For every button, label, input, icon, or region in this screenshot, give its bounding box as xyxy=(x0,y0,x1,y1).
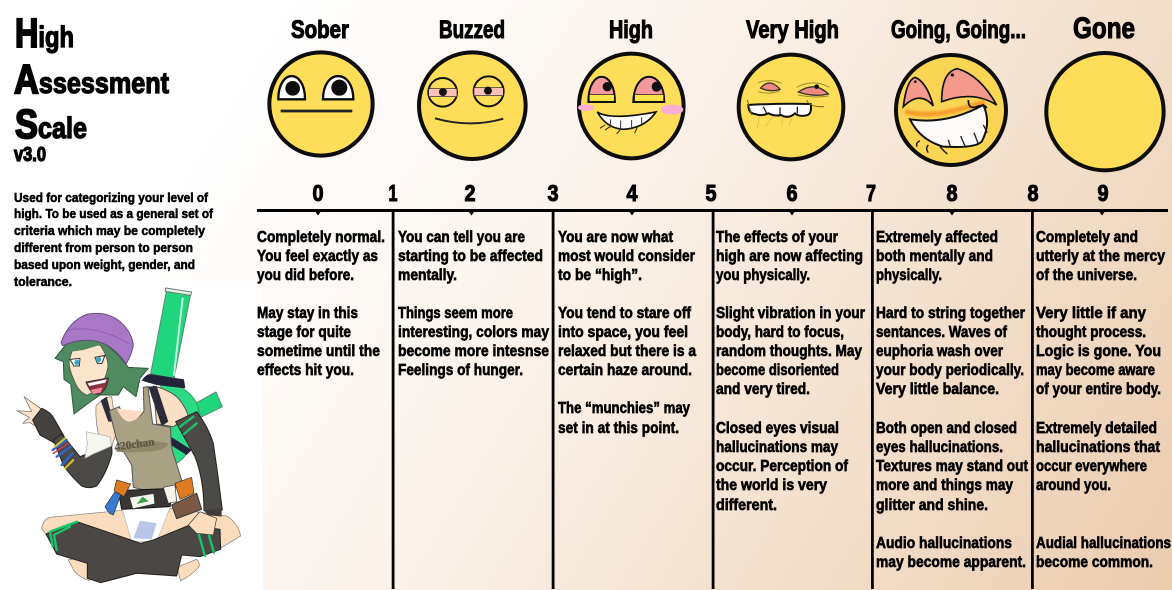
text column: level 2 xyxy=(398,229,549,379)
title xyxy=(14,10,169,147)
text column: level 6: The effects of your xyxy=(716,229,838,246)
text column: level 0: you did before. xyxy=(257,267,354,284)
icon: gone face xyxy=(1046,53,1164,170)
text column: level 9: Completely and xyxy=(1036,229,1138,246)
text column: level 4: The “munchies” may xyxy=(558,400,690,417)
icon: very high face xyxy=(739,55,843,159)
text column: level 2: Feelings of hunger. xyxy=(398,362,523,379)
text column: level 4: set in at this point. xyxy=(558,420,679,437)
text column: level 6: and very tired. xyxy=(716,381,810,398)
scale numbers: 6 xyxy=(786,180,798,206)
scale numbers: 8 xyxy=(946,180,958,206)
version label: v3.0 xyxy=(14,144,46,166)
text column: level 8: Hard to string together xyxy=(876,305,1025,322)
text column: level 2: mentally. xyxy=(398,267,457,284)
text column: level 6: occur. Perception of xyxy=(716,458,849,475)
heading: Buzzed: Buzzed xyxy=(439,16,505,44)
text column: level 9 xyxy=(1036,229,1171,571)
scale axis with dividers and ticks xyxy=(257,209,1168,589)
text column: level 9: occur everywhere xyxy=(1036,458,1147,475)
intro text: tolerance. xyxy=(14,274,72,289)
text column: level 4: to be “high”. xyxy=(558,267,642,284)
text column: level 9: around you. xyxy=(1036,477,1111,494)
text column: level 6: different. xyxy=(716,497,777,514)
scale numbers: 9 xyxy=(1098,180,1108,206)
text column: level 6: hallucinations may xyxy=(716,439,838,456)
text column: level 8: euphoria wash over xyxy=(876,343,1003,360)
text column: level 0: Completely normal. xyxy=(257,229,385,246)
text column: level 6: become disoriented xyxy=(716,362,839,379)
intro text: different from person to person xyxy=(14,240,193,255)
illustration: character with bong: 420chan xyxy=(114,436,156,454)
intro text: Used for categorizing your level of xyxy=(14,190,209,205)
text column: level 6 xyxy=(716,229,865,514)
text column: level 6: you physically. xyxy=(716,267,810,284)
text column: level 8: glitter and shine. xyxy=(876,497,988,514)
text column: level 4: most would consider xyxy=(558,248,695,265)
scale numbers: 5 xyxy=(706,180,717,206)
scale numbers: 1 xyxy=(388,180,398,206)
heading: High: High xyxy=(609,16,653,44)
text column: level 9: Very little if any xyxy=(1036,305,1146,322)
intro text: high. To be used as a general set of xyxy=(14,206,214,221)
scale numbers xyxy=(312,180,1108,206)
text column: level 0: stage for quite xyxy=(257,324,351,341)
text column: level 0: You feel exactly as xyxy=(257,248,378,265)
text column: level 2: Things seem more xyxy=(398,305,513,322)
text column: level 0: May stay in this xyxy=(257,305,358,322)
text column: level 8: Both open and closed xyxy=(876,420,1017,437)
heading: Very High: Very High xyxy=(746,16,839,44)
text column: level 6: body, hard to focus, xyxy=(716,324,844,341)
text column: level 4: You tend to stare off xyxy=(558,305,692,322)
title: High xyxy=(15,10,74,56)
text column: level 4 xyxy=(558,229,696,437)
text column: level 9: of the universe. xyxy=(1036,267,1137,284)
scale numbers: 7 xyxy=(866,180,876,206)
scale numbers: 2 xyxy=(464,180,476,206)
intro text: based upon weight, gender, and xyxy=(14,257,195,272)
text column: level 0: sometime until the xyxy=(257,343,380,360)
scale numbers: 4 xyxy=(626,180,638,206)
text column: level 8: physically. xyxy=(876,267,942,284)
heading: Sober: Sober xyxy=(291,16,349,44)
text column: level 8 xyxy=(876,229,1029,571)
title: Scale xyxy=(15,101,87,147)
scale numbers: 3 xyxy=(548,180,558,206)
text column: level 8: both mentally and xyxy=(876,248,993,265)
text column: level 2: become more intesnse xyxy=(398,343,549,360)
heading: Gone: Gone xyxy=(1073,12,1135,45)
title: Assessment xyxy=(14,56,169,102)
illustration: character with bong xyxy=(17,288,241,583)
text column: level 8: your body periodically. xyxy=(876,362,1024,379)
icon: high face xyxy=(578,54,684,158)
text column: level 8: eyes hallucinations. xyxy=(876,439,1003,456)
text column: level 8: Textures may stand out xyxy=(876,458,1029,475)
text column: level 6: random thoughts. May xyxy=(716,343,862,360)
text column: level 4: You are now what xyxy=(558,229,674,246)
text column: level 6: Closed eyes visual xyxy=(716,420,839,437)
icon: sober face xyxy=(269,52,373,156)
text column: level 4: into space, you feel xyxy=(558,324,688,341)
intro text xyxy=(14,190,214,289)
text column: level 6: Slight vibration in your xyxy=(716,305,865,322)
text column: level 8: Extremely affected xyxy=(876,229,998,246)
text column: level 2: interesting, colors may xyxy=(398,324,549,341)
text column: level 9: become common. xyxy=(1036,554,1153,571)
text column: level 8: Audio hallucinations xyxy=(876,535,1012,552)
text column: level 6: high are now affecting xyxy=(716,248,863,265)
text column: level 8: more and things may xyxy=(876,477,1013,494)
text column: level 0: effects hit you. xyxy=(257,362,354,379)
text column: level 8: may become apparent. xyxy=(876,554,1026,571)
heading: Going, Going...: Going, Going... xyxy=(891,16,1026,44)
text column: level 4: certain haze around. xyxy=(558,362,692,379)
intro text: criteria which may be completely xyxy=(14,223,206,238)
text column: level 8: Very little balance. xyxy=(876,381,999,398)
text column: level 9: thought process. xyxy=(1036,324,1146,341)
text column: level 0 xyxy=(257,229,385,379)
scale numbers: 0 xyxy=(312,180,324,206)
text column: level 2: starting to be affected xyxy=(398,248,543,265)
icon: going going face xyxy=(896,55,1006,165)
text column: level 4: relaxed but there is a xyxy=(558,343,696,360)
text column: level 2: You can tell you are xyxy=(398,229,525,246)
scale numbers: 8 xyxy=(1028,180,1039,206)
text column: level 6: the world is very xyxy=(716,477,827,494)
text column: level 8: sentances. Waves of xyxy=(876,324,1008,341)
icon: buzzed face xyxy=(419,52,526,159)
